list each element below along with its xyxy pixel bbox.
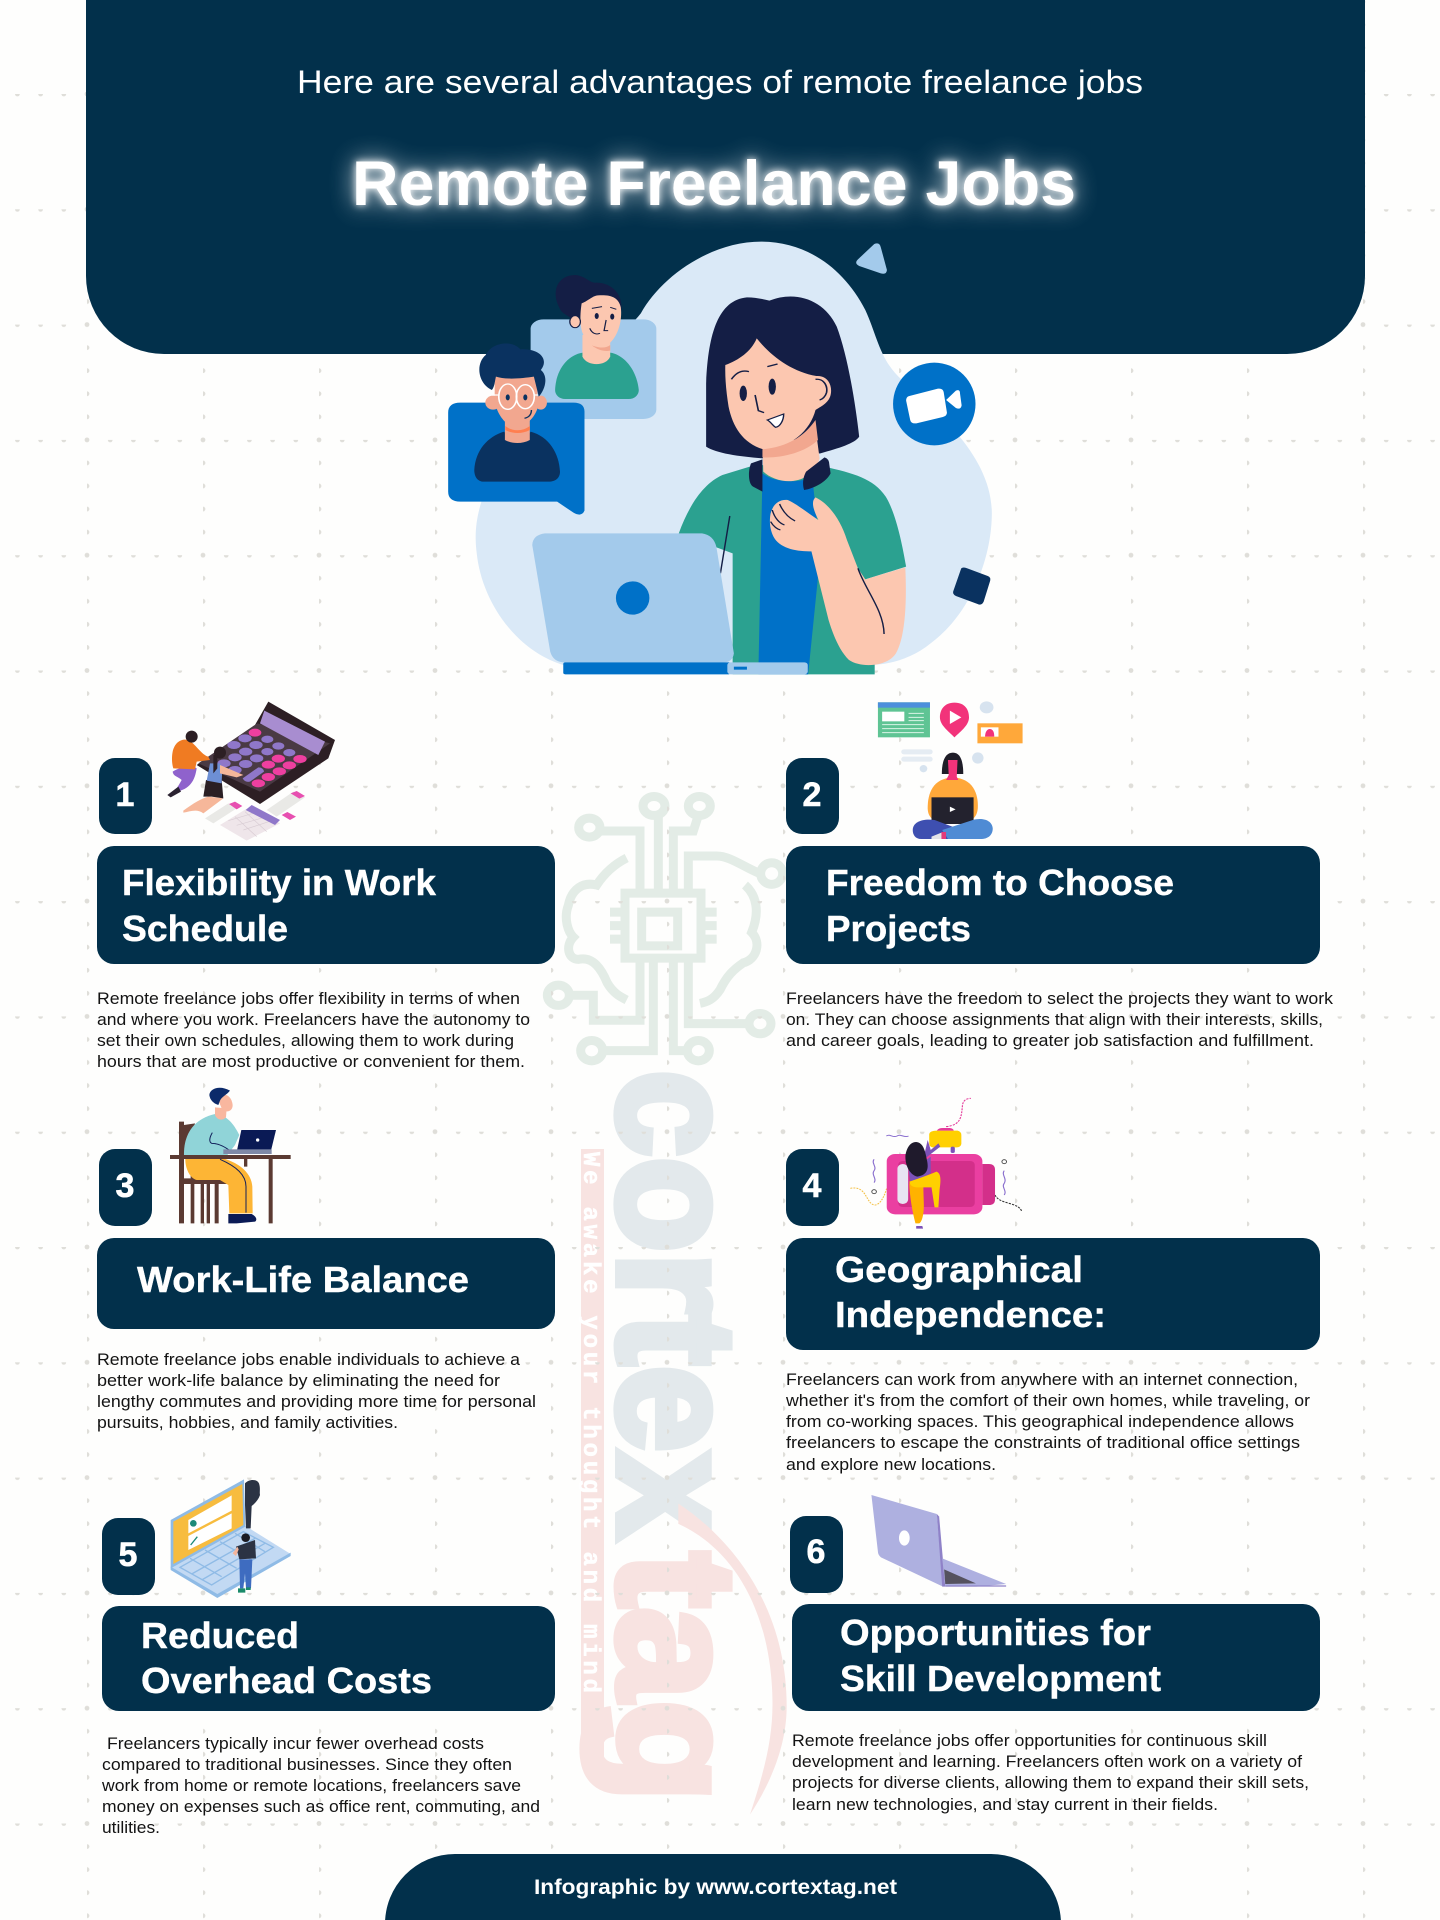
heading 6: Skill Development — [840, 1658, 1161, 1699]
body text 4: from co-working spaces. This geographical independence allows — [786, 1413, 1294, 1431]
number badge 2 — [786, 758, 839, 834]
front caller card — [448, 343, 584, 515]
heading 3: Work-Life Balance — [137, 1259, 469, 1300]
woman: hair back — [706, 296, 859, 458]
body text 4: whether it's from the comfort of their own homes, while traveling, or — [785, 1392, 1311, 1410]
icon: triangle — [856, 243, 887, 274]
body text 5: compared to traditional businesses. Since they often — [102, 1756, 512, 1774]
body text 2: and career goals, leading to greater job satisfaction and fulfillment. — [786, 1032, 1314, 1050]
woman: collar — [749, 457, 831, 492]
woman: shirt — [679, 465, 906, 674]
header panel — [86, 0, 1365, 354]
body text 6 — [792, 1732, 1309, 1814]
heading 4: Independence: — [835, 1294, 1106, 1335]
heading 4 — [786, 1238, 1320, 1350]
heading 5: Reduced — [141, 1615, 299, 1656]
number badge 3 — [99, 1149, 152, 1226]
footer bar — [385, 1854, 1061, 1920]
body text 1: and where you work. Freelancers have the autonomy to — [97, 1011, 530, 1029]
illustration: lilac laptop — [871, 1495, 1006, 1587]
body text 1: set their own schedules, allowing them to work during — [97, 1032, 514, 1050]
heading 6 — [792, 1604, 1320, 1711]
card 1: flexibility in work schedule — [97, 702, 555, 1071]
hero illustration: video call — [448, 242, 992, 674]
laptop — [532, 533, 734, 662]
icon: dark square — [953, 567, 990, 605]
card 4: geographical independence — [785, 1098, 1320, 1474]
woman: face — [725, 338, 831, 449]
heading 6: Opportunities for — [840, 1612, 1151, 1653]
watermark: tagline bar — [581, 1149, 604, 1761]
body text 3: Remote freelance jobs enable individuals to achieve a — [97, 1351, 521, 1369]
body text 1 — [97, 990, 530, 1071]
watermark: tagline: We awake your thought and mind — [576, 1152, 603, 1693]
watermark: cortex wordmark: cortex — [583, 1070, 771, 1539]
number badge 4: 4 — [803, 1167, 822, 1205]
body text 2: on. They can choose assignments that align with their interests, skills, — [786, 1011, 1323, 1029]
heading 1: Schedule — [122, 908, 288, 949]
body text 3: better work-life balance by eliminating the need for — [97, 1372, 501, 1390]
heading 2 — [786, 846, 1320, 964]
body text 6: Remote freelance jobs offer opportunities for continuous skill — [792, 1732, 1267, 1750]
card 2: freedom to choose projects — [786, 701, 1334, 1050]
woman: arm and hand — [770, 497, 906, 665]
illustration: people on giant laptop — [171, 1479, 291, 1598]
heading 3 — [97, 1238, 555, 1329]
number badge 1: 1 — [116, 776, 134, 814]
back caller card — [531, 275, 656, 419]
number badge 2: 2 — [803, 776, 821, 814]
body text 4: freelancers to escape the constraints of traditional office settings — [786, 1434, 1300, 1452]
heading 2: Projects — [826, 908, 971, 949]
body text 6: development and learning. Freelancers often work on a variety of — [792, 1753, 1302, 1771]
body text 4: and explore new locations. — [786, 1456, 996, 1474]
heading 1: Flexibility in Work — [122, 862, 437, 903]
number badge 4 — [786, 1149, 839, 1226]
body text 3 — [97, 1351, 536, 1432]
body text 5: Freelancers typically incur fewer overhead costs — [107, 1735, 484, 1753]
body text 4 — [785, 1371, 1311, 1474]
body text 6: projects for diverse clients, allowing them to expand their skill sets, — [792, 1774, 1309, 1792]
body text 5: money on expenses such as office rent, commuting, and — [102, 1798, 540, 1816]
main character — [532, 296, 906, 674]
body text 2: Freelancers have the freedom to select the projects they want to work — [786, 990, 1334, 1008]
illustration: calculator with people — [167, 702, 335, 841]
card 3: work-life balance — [97, 1088, 555, 1432]
body text 6: learn new technologies, and stay current in their fields. — [792, 1796, 1218, 1814]
heading 4: Geographical — [835, 1249, 1083, 1290]
woman: inner blue top — [758, 473, 820, 674]
number badge 5: 5 — [119, 1536, 137, 1574]
body text 1: Remote freelance jobs offer flexibility in terms of when — [97, 990, 520, 1008]
number badge 3: 3 — [116, 1167, 134, 1205]
card 6: opportunities for skill development — [790, 1495, 1320, 1814]
watermark: tag wordmark: tag — [583, 1552, 771, 1802]
number badge 6 — [790, 1516, 843, 1593]
subtitle: Here are several advantages of remote freelance jobs — [297, 64, 1143, 100]
woman: neck — [762, 440, 820, 481]
heading 5 — [102, 1606, 555, 1711]
watermark: circuit brain — [547, 797, 783, 1061]
illustration: woman watching video on laptop — [878, 701, 1023, 839]
watermark: swoosh — [678, 1504, 787, 1815]
footer bar: Infographic by www.cortextag.net — [534, 1876, 897, 1899]
watermark: cortextag logo — [547, 797, 787, 1815]
icon: video camera — [893, 363, 976, 445]
title: Remote Freelance Jobs — [352, 149, 1076, 219]
hero: background blob — [476, 242, 992, 665]
heading 2: Freedom to Choose — [826, 862, 1174, 903]
body text 5: work from home or remote locations, freelancers save — [101, 1777, 521, 1795]
body text 3: pursuits, hobbies, and family activities. — [97, 1414, 398, 1432]
card 5: reduced overhead costs — [101, 1479, 555, 1837]
illustration: woman charging battery — [850, 1098, 1022, 1229]
body text 4: Freelancers can work from anywhere with an internet connection, — [786, 1371, 1298, 1389]
heading 5: Overhead Costs — [141, 1660, 432, 1701]
body text 5 — [101, 1735, 540, 1837]
body text 5: utilities. — [102, 1819, 160, 1837]
illustration: man at desk with laptop — [170, 1088, 291, 1223]
number badge 6: 6 — [807, 1533, 825, 1571]
number badge 1 — [99, 758, 152, 834]
heading 1 — [97, 846, 555, 964]
body text 1: hours that are most productive or convenient for them. — [97, 1053, 525, 1071]
body text 3: lengthy commutes and providing more time for personal — [97, 1393, 536, 1411]
number badge 5 — [102, 1518, 155, 1595]
body text 2 — [786, 990, 1334, 1050]
